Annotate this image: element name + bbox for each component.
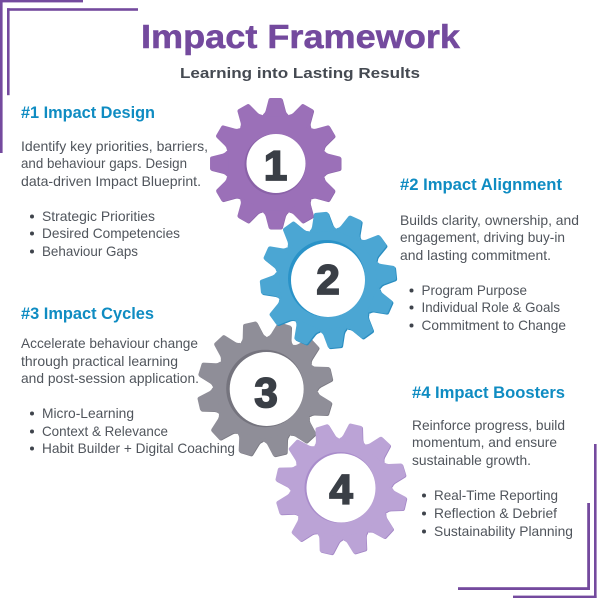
bullet list: impact cycles: Context & Relevance: [42, 423, 168, 439]
text block: impact design description: [21, 138, 208, 189]
bullet list: impact cycles: Micro-Learning: [42, 405, 134, 421]
bullet list: impact boosters: [422, 487, 573, 539]
bullet list: impact alignment: Commitment to Change: [422, 317, 566, 333]
gear 3: 3: [254, 369, 278, 416]
bullet list: impact boosters: Sustainability Planning: [434, 523, 573, 539]
text block: impact alignment description: Builds clarity, ownership, and: [400, 212, 579, 228]
bullet list: impact alignment: [410, 282, 566, 333]
text block: impact cycles description: and post-session application.: [21, 370, 199, 386]
bullet list: impact alignment: Individual Role & Goals: [422, 299, 560, 315]
text block: impact design description: and behaviour gaps. Design: [21, 155, 187, 171]
bullet list: impact design: Desired Competencies: [42, 225, 180, 241]
heading: impact alignment: #2 Impact Alignment: [400, 175, 562, 194]
panel: impact boosters: [412, 383, 573, 539]
bullet list: impact boosters: Real-Time Reporting: [434, 487, 558, 503]
text block: impact boosters description: sustainable growth.: [412, 452, 531, 468]
gear 4: [259, 407, 424, 572]
bullet list: impact design: Strategic Priorities: [42, 208, 155, 224]
text block: impact alignment description: engagement, driving buy-in: [400, 229, 565, 245]
text block: impact cycles description: Accelerate behaviour change: [21, 335, 198, 351]
text block: impact alignment description: [400, 212, 579, 263]
gear 1: [210, 98, 341, 229]
title: Impact Framework: [141, 18, 461, 55]
text block: impact cycles description: [21, 335, 199, 386]
bullet list: impact alignment: Program Purpose: [422, 282, 527, 298]
gear 3: [183, 307, 347, 471]
bullet list: impact boosters: Reflection & Debrief: [434, 505, 557, 521]
text block: impact cycles description: through practical learning: [21, 353, 178, 369]
bullet list: impact design: [30, 208, 180, 259]
bullet list: impact cycles: Habit Builder + Digital Coaching: [42, 440, 235, 456]
text block: impact design description: data-driven Impact Blueprint.: [21, 173, 201, 189]
decorative frame: bottom right corner: [458, 444, 597, 598]
subtitle: Learning into Lasting Results: [180, 65, 420, 82]
text block: impact design description: Identify key priorities, barriers,: [21, 138, 208, 154]
panel: impact alignment: [400, 175, 579, 333]
text block: impact boosters description: [412, 417, 565, 468]
panel: impact cycles: [21, 304, 235, 456]
gear 1: 1: [264, 142, 287, 189]
gear 2: 2: [316, 256, 340, 303]
text block: impact boosters description: momentum, and ensure: [412, 434, 557, 450]
text block: impact alignment description: and lasting commitment.: [400, 247, 551, 263]
heading: impact design: #1 Impact Design: [21, 103, 155, 122]
heading: impact boosters: #4 Impact Boosters: [412, 383, 565, 402]
decorative frame: top left corner: [0, 0, 138, 153]
bullet list: impact cycles: [30, 405, 235, 456]
gear 2: [253, 205, 404, 356]
gear 4: 4: [329, 466, 353, 513]
bullet list: impact design: Behaviour Gaps: [42, 243, 138, 259]
text block: impact boosters description: Reinforce progress, build: [412, 417, 565, 433]
heading: impact cycles: #3 Impact Cycles: [21, 304, 154, 323]
panel: impact design: [21, 103, 208, 259]
